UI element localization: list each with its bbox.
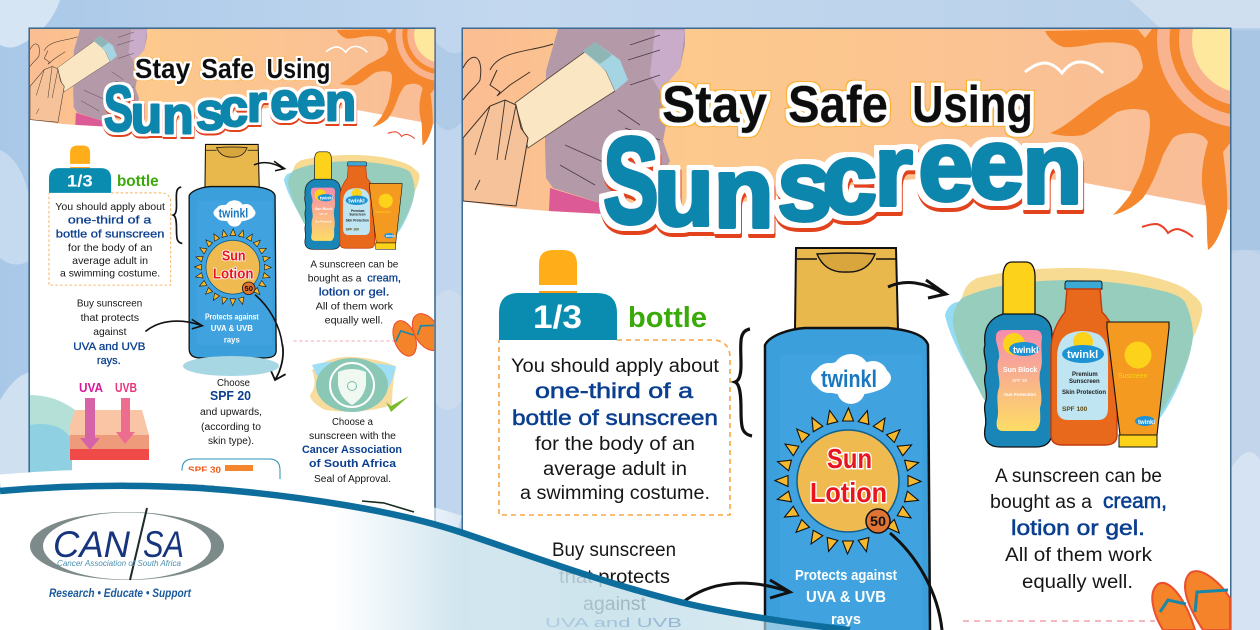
title: Safe [788, 76, 888, 134]
product text: Premium [1072, 372, 1098, 378]
SPF text: skin type). [208, 436, 254, 447]
product text: Sunscreen [349, 213, 366, 217]
CANSA logo: SA [143, 524, 184, 565]
poster: large right copy [462, 0, 1260, 630]
bottle label text: 50 [870, 513, 886, 529]
UV protection text: Buy sunscreen [77, 299, 142, 310]
one third bottle panel: a swimming costume. [520, 483, 710, 504]
product text: twinkl [1013, 345, 1039, 355]
product text: twinkl [348, 198, 365, 204]
UV protection text: rays. [97, 355, 121, 367]
product text: SPF 30 [319, 213, 328, 216]
title: Stay [662, 76, 767, 134]
one third bottle panel: one-third of a [535, 380, 693, 403]
title: unscreen [654, 107, 1082, 248]
UVA UVB skin diagram: UVA [79, 380, 104, 395]
product text: bought as a [990, 492, 1092, 513]
one third bottle panel: bottle of sunscreen [512, 407, 718, 430]
product text: equally well. [1022, 572, 1133, 593]
one third bottle panel: for the body of an [68, 243, 152, 254]
product text: cream, [367, 272, 401, 284]
product text: Premium [351, 209, 365, 213]
seal of approval icon [310, 357, 409, 412]
CANSA logo: CAN [53, 524, 130, 565]
footer wave [0, 476, 850, 630]
one third bottle panel: bottle of sunscreen [56, 229, 164, 241]
bottle label text: Protects against [795, 567, 897, 584]
CANSA logo: Cancer Association of South Africa [57, 559, 182, 568]
UV protection text: UVA and UVB [545, 615, 682, 630]
title: Stay [135, 53, 191, 84]
one third bottle panel [511, 299, 720, 504]
product text: Suscreen [1118, 373, 1148, 380]
title: unscreen [131, 72, 356, 145]
one third bottle panel: bottle [117, 173, 159, 190]
one third bottle panel: bottle [628, 302, 707, 334]
poster shadow [28, 27, 436, 522]
product text: SPF 100 [1062, 406, 1088, 413]
one third bottle panel: 1/3 [533, 299, 582, 335]
product text: twinkl [1067, 349, 1098, 361]
product text: bought as a [308, 273, 362, 284]
product text: Suscreen [375, 210, 391, 214]
flip flop right [412, 313, 434, 351]
product text [990, 345, 1167, 593]
bottle bottom [189, 345, 276, 358]
bottle label text: Sun [222, 248, 246, 264]
SPF text [200, 378, 262, 447]
poster white sheet [30, 29, 434, 522]
seal of approval text: Seal of Approval. [314, 474, 391, 485]
seal of approval text: sunscreen with the [309, 431, 396, 442]
SPF text: SPF 20 [210, 388, 251, 403]
poster: small left copy [28, 27, 436, 522]
title: Using [912, 76, 1033, 134]
one third bottle panel: average adult in [543, 459, 687, 480]
product text: equally well. [325, 316, 383, 327]
bottle label text: Protects against [205, 312, 259, 321]
one third bottle panel [55, 172, 165, 280]
CANSA logo [30, 508, 224, 600]
bottle outline bottom [189, 345, 276, 358]
UV protection text: against [93, 327, 127, 338]
product text: Sun Protection [315, 220, 332, 223]
product text: All of them work [316, 301, 394, 312]
seal of approval text: Cancer Association [302, 444, 402, 456]
UV protection text [73, 299, 145, 367]
bottle label text [205, 207, 259, 345]
UV protection text: against [583, 594, 647, 615]
seal of approval text [302, 417, 402, 485]
product text: twinkl [320, 196, 333, 202]
seal of approval text: of South Africa [309, 458, 397, 470]
bottle label text: 50 [244, 284, 253, 293]
product text: lotion or gel. [319, 287, 389, 299]
poster shadow [462, 28, 1232, 630]
poster white sheet [463, 29, 1230, 630]
bottle label text: rays [831, 611, 861, 628]
product text: A sunscreen can be [310, 260, 399, 271]
poster artwork [463, 0, 1260, 630]
title: Using [267, 53, 330, 84]
SPF comparison box [182, 459, 280, 490]
title: S [104, 73, 133, 145]
CANSA logo: Research • Educate • Support [49, 588, 192, 600]
bottle label text: UVA & UVB [806, 589, 886, 606]
product text [308, 196, 401, 327]
product text: A sunscreen can be [995, 466, 1162, 487]
flip flop left [1152, 583, 1195, 630]
bottle label text: Lotion [213, 266, 253, 282]
product text: cream, [1103, 490, 1167, 513]
UV protection text: that protects [559, 567, 670, 588]
one third bottle panel: one-third of a [68, 214, 152, 226]
bottle shadow [183, 356, 279, 376]
UVA UVB skin diagram: UVB [115, 380, 137, 395]
SPF comparison box: SPF 50 [188, 478, 221, 489]
product text: SPF 100 [346, 227, 359, 231]
product text: twinkl [386, 234, 395, 238]
product text: Skin Protection [1062, 390, 1106, 396]
arrow to SPF text [269, 345, 286, 380]
bottle label text: UVA & UVB [211, 323, 253, 333]
bottle label text [795, 366, 897, 628]
product text: SPF 30 [1012, 378, 1028, 383]
bottle label text: Lotion [810, 477, 887, 508]
one third bottle panel: 1/3 [67, 172, 93, 191]
UV protection text: Buy sunscreen [552, 540, 676, 561]
one third bottle panel: for the body of an [535, 434, 695, 455]
UV protection text: UVA and UVB [73, 341, 145, 353]
one third bottle panel: You should apply about [511, 356, 720, 377]
bottle label text: Sun [827, 443, 872, 474]
UV protection text: that protects [81, 313, 139, 324]
title: Safe [201, 53, 254, 84]
poster artwork [30, 29, 434, 346]
one third bottle panel: You should apply about [55, 202, 165, 213]
bottle label text: rays [224, 336, 240, 345]
SPF text: and upwards, [200, 407, 262, 418]
product text: All of them work [1005, 545, 1153, 566]
bottle label text: twinkl [821, 366, 877, 393]
bottle label text: twinkl [219, 207, 248, 221]
title: S [603, 113, 659, 250]
UVA UVB skin diagram [30, 380, 149, 480]
one third bottle panel: a swimming costume. [60, 269, 160, 280]
SPF text: Choose [217, 378, 250, 389]
product text: Sunscreen [1069, 379, 1100, 385]
product text: lotion or gel. [1011, 517, 1145, 540]
product text: Sun Block [315, 207, 333, 211]
flip flop left [388, 317, 421, 359]
product text: twinkl [1138, 420, 1155, 426]
seal of approval text: Choose a [332, 417, 373, 428]
SPF text: (according to [201, 422, 261, 433]
product text: Sun Protection [1004, 392, 1036, 397]
UV protection text [545, 540, 682, 630]
one third bottle panel: average adult in [72, 256, 148, 267]
flip flop right [1185, 571, 1230, 630]
product text: Skin Protection [346, 218, 369, 222]
SPF comparison box: SPF 30 [188, 465, 221, 476]
product text: Sun Block [1003, 367, 1037, 374]
